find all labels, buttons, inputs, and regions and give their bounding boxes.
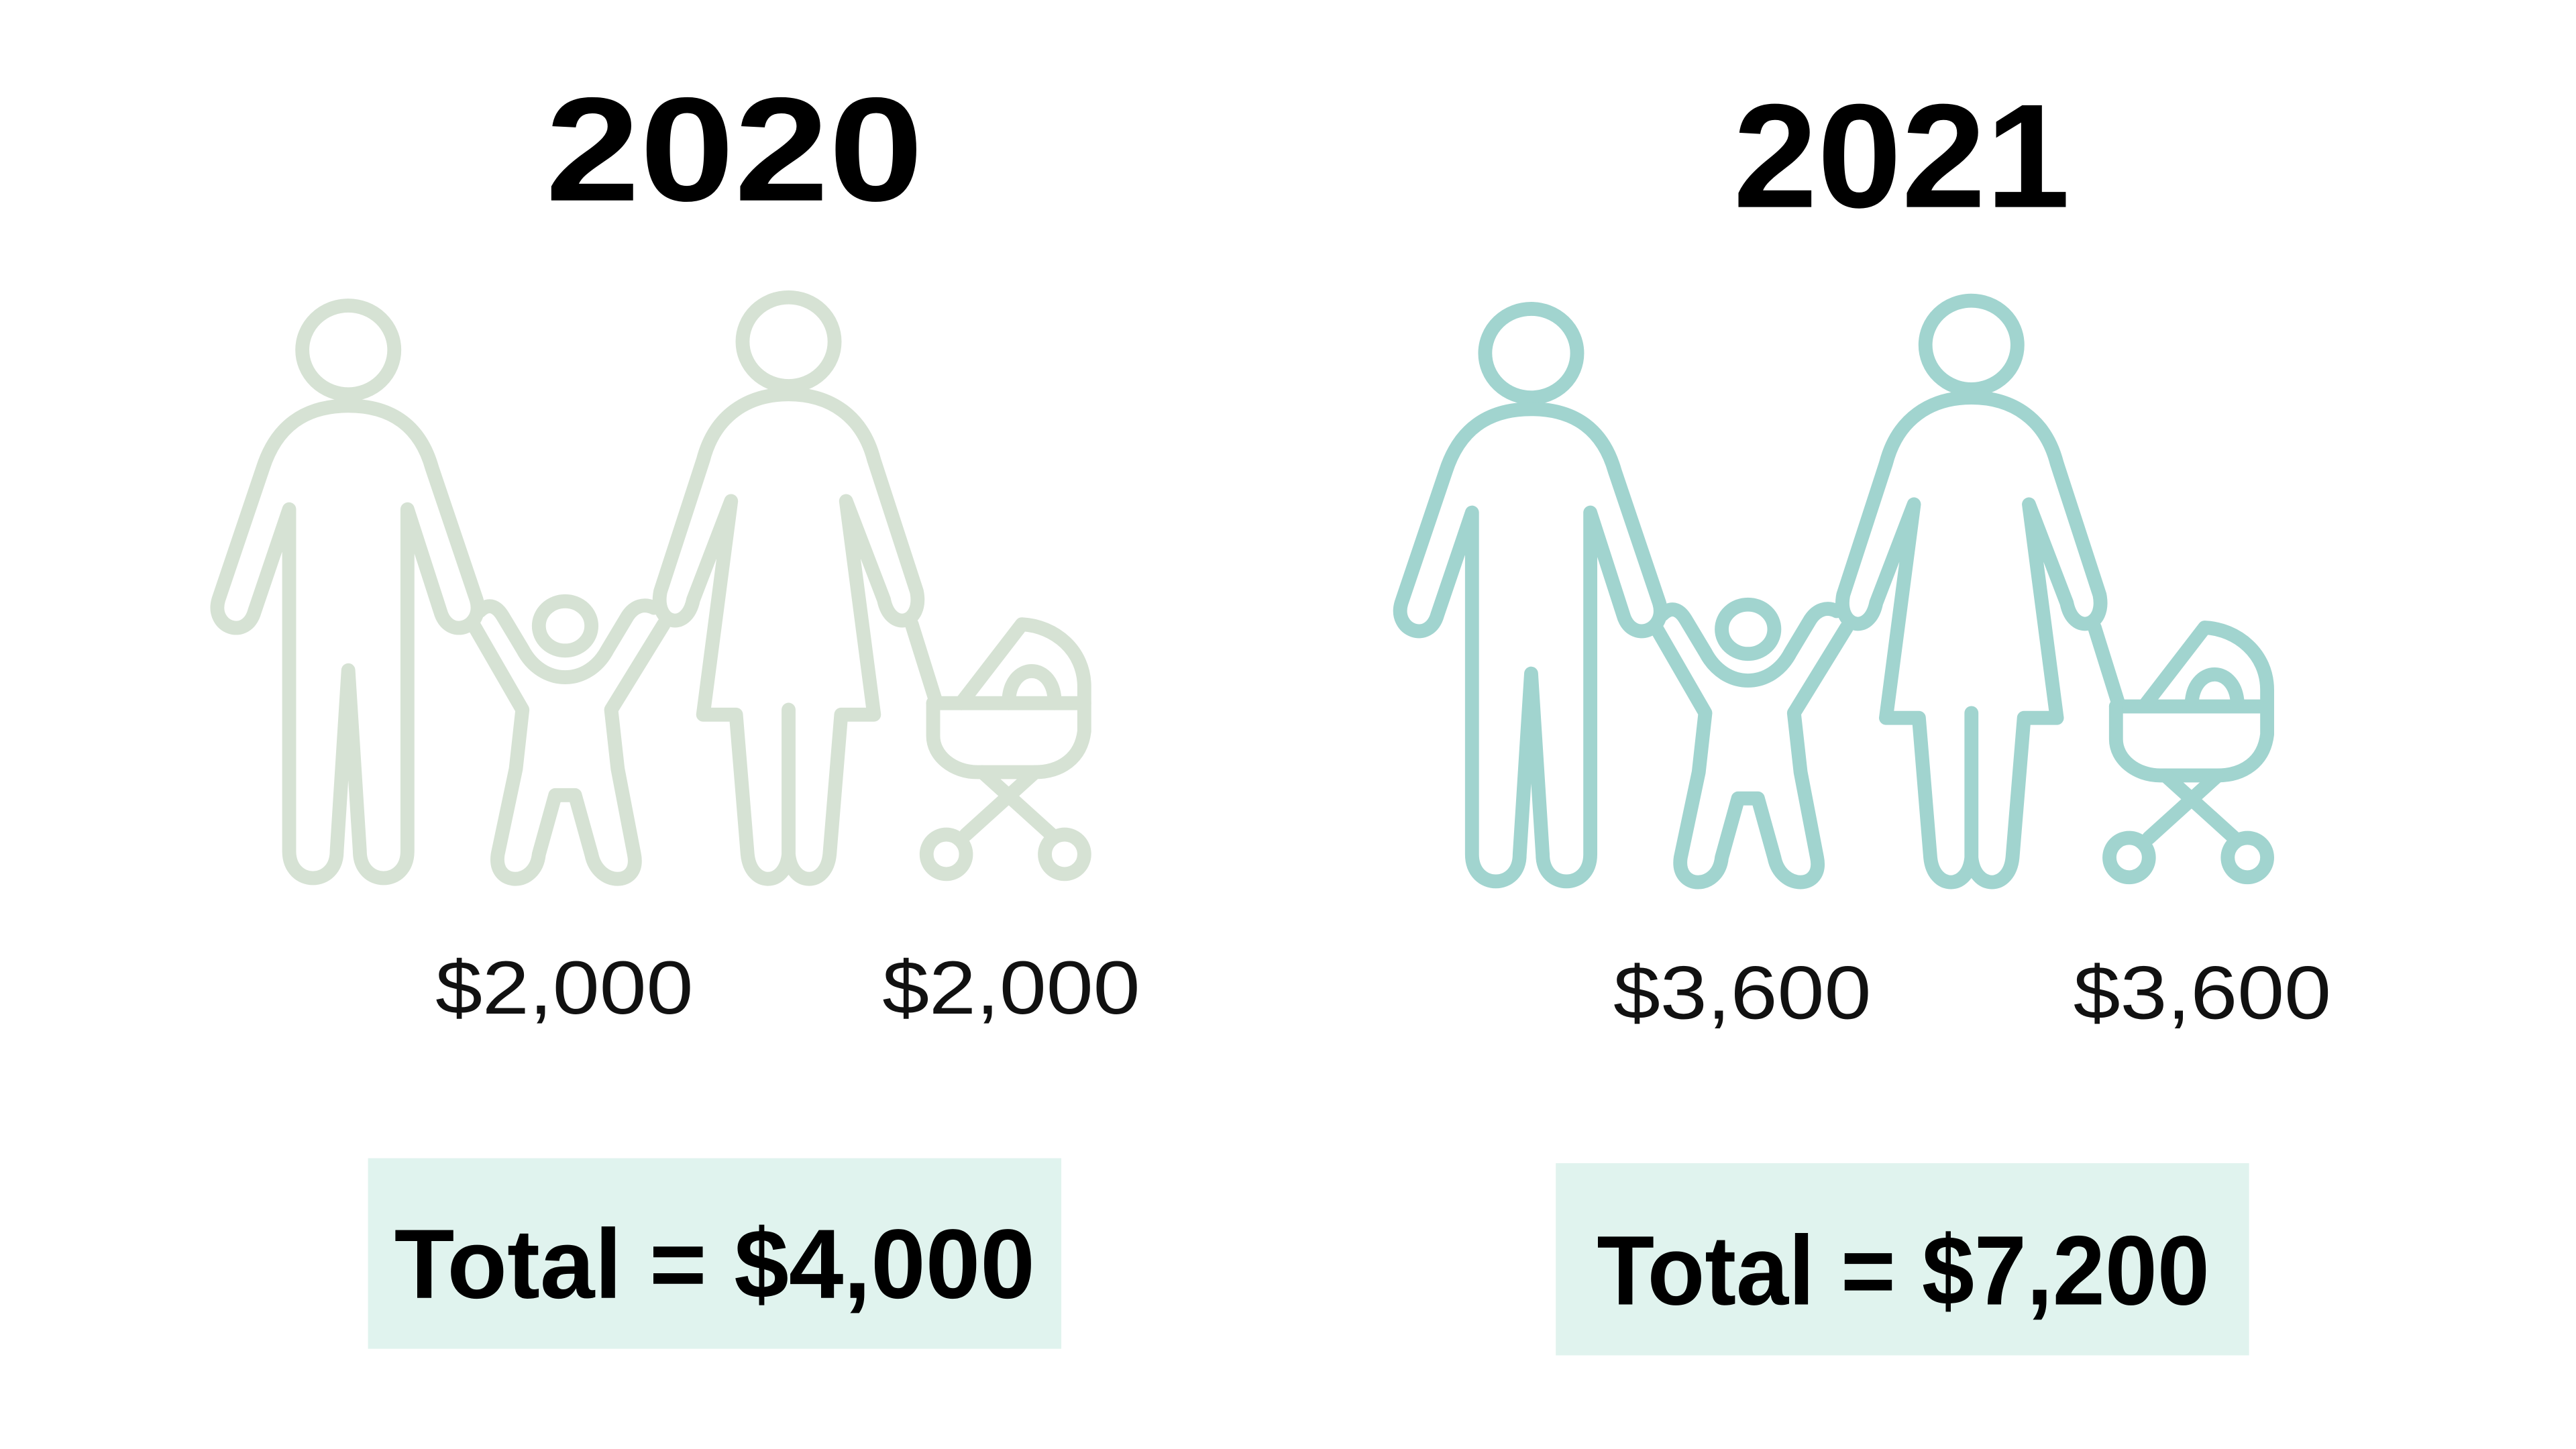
icon: family 2021 xyxy=(1400,301,2267,882)
title: 2020: 2020 xyxy=(545,66,923,232)
amount: baby 2021: $3,600 xyxy=(2074,950,2331,1034)
total box 2020: Total = $4,000 xyxy=(394,1210,1035,1320)
icon: family 2020 xyxy=(217,297,1084,879)
amount: child 2020: $2,000 xyxy=(435,945,693,1030)
total box 2021: Total = $7,200 xyxy=(1597,1216,2210,1326)
total box 2021 xyxy=(1556,1163,2249,1355)
amount: baby 2020: $2,000 xyxy=(882,945,1140,1030)
amount: child 2021: $3,600 xyxy=(1613,950,1871,1034)
title: 2021: 2021 xyxy=(1733,73,2070,239)
total box 2020 xyxy=(368,1159,1061,1349)
